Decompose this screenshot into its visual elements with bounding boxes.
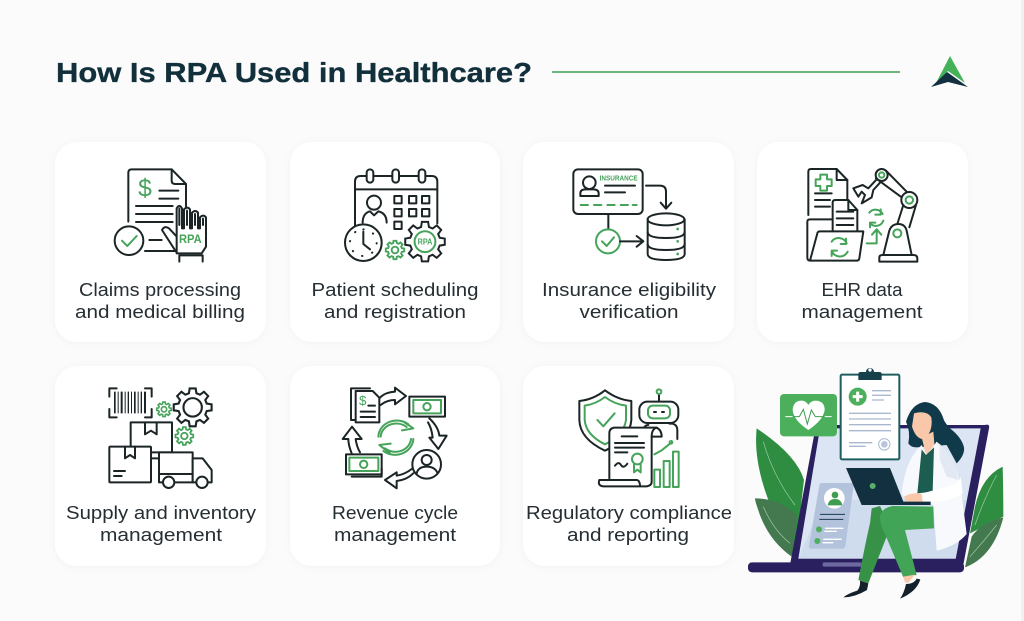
icon: claim document with robot hand: RPA	[179, 232, 202, 246]
icon: calendar with clock and gears: RPA	[418, 238, 433, 247]
icon: barcode, boxes and truck	[109, 388, 212, 488]
heart monitor card	[780, 394, 837, 436]
title: How Is RPA Used in Healthcare?	[56, 57, 532, 88]
label	[542, 279, 717, 322]
icon: revenue cycle: $	[359, 393, 367, 408]
label	[312, 279, 478, 322]
label: and medical billing	[75, 301, 245, 322]
icon: claim document with robot hand: $	[138, 176, 152, 203]
icon: calendar with clock and gears	[345, 169, 445, 261]
label: management	[334, 524, 456, 545]
icon: revenue cycle	[343, 388, 447, 488]
icon: shield, certificate, robot and bars	[579, 389, 679, 487]
illustration: doctor with laptop	[748, 368, 1003, 599]
label: Patient scheduling	[312, 279, 478, 300]
label: Insurance eligibility	[542, 279, 717, 300]
label	[802, 279, 922, 322]
panel: claims processing	[55, 142, 266, 342]
panel: insurance eligibility	[523, 142, 734, 342]
label	[526, 502, 732, 545]
label: Revenue cycle	[332, 502, 458, 523]
doctor figure	[843, 402, 967, 599]
label: management	[802, 301, 922, 322]
panel: supply and inventory	[55, 366, 266, 566]
label: and registration	[324, 301, 466, 322]
profile card	[809, 483, 854, 549]
icon: records folder and robot arm	[807, 169, 917, 262]
label: management	[100, 524, 222, 545]
panel: patient scheduling	[290, 142, 500, 342]
logo	[931, 56, 968, 87]
label: Supply and inventory	[66, 502, 257, 523]
label	[75, 279, 245, 322]
label: Regulatory compliance	[526, 502, 732, 523]
title rule	[552, 71, 900, 73]
label: EHR data	[822, 279, 903, 300]
laptop	[748, 425, 989, 572]
icon: claim document with robot hand	[115, 169, 206, 262]
icon: insurance card and database: INSURANCE	[600, 175, 638, 182]
label: Claims processing	[79, 279, 241, 300]
label: and reporting	[567, 524, 689, 545]
icon: insurance card and database	[573, 169, 685, 260]
panel: EHR data	[757, 142, 968, 342]
label	[66, 502, 257, 545]
label	[332, 502, 458, 545]
panel: revenue cycle	[290, 366, 500, 566]
leaves	[755, 428, 1003, 567]
label: verification	[580, 301, 678, 322]
panel: regulatory compliance	[523, 366, 734, 566]
clipboard	[841, 368, 899, 459]
